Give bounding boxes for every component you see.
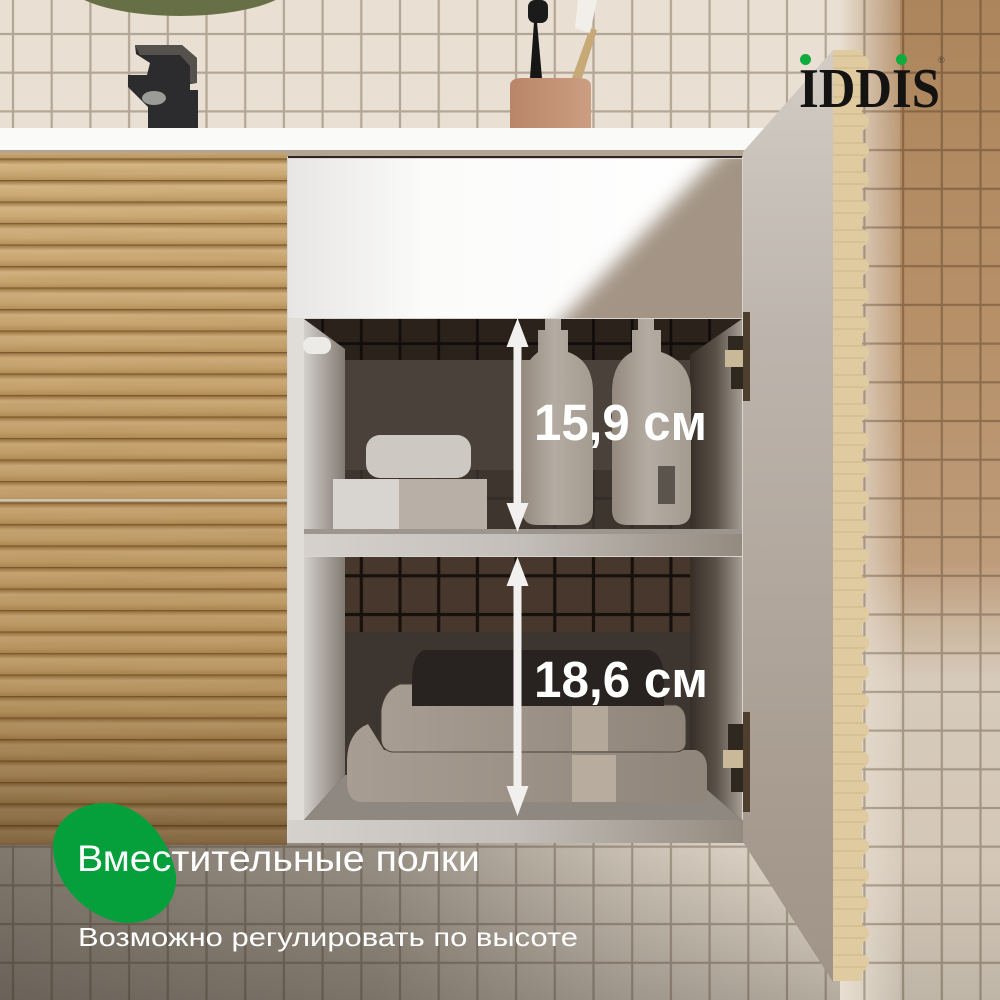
logo wordmark: IDDIS [799, 58, 940, 120]
upper dimension label: 15,9 см [534, 394, 707, 451]
lower compartment [304, 557, 742, 820]
heading: Вместительные полки [77, 838, 480, 879]
toothbrushes [528, 0, 597, 78]
countertop [0, 128, 764, 158]
green blob [53, 803, 176, 923]
shelf support pin [303, 337, 331, 354]
lower dimension arrow [506, 557, 528, 816]
logo green dots [800, 54, 907, 65]
bottles [522, 319, 691, 525]
mirror edge [65, 0, 295, 16]
upper hinge [725, 312, 750, 401]
registered mark: ® [938, 55, 945, 65]
bottom towel band [572, 755, 616, 802]
door wood edge [833, 50, 869, 981]
dark towel [412, 650, 664, 706]
upper compartment [303, 319, 742, 530]
middle towel [381, 684, 686, 752]
lower hinge [723, 712, 750, 812]
cabinet body [287, 158, 744, 843]
cream jar [366, 435, 471, 478]
open door [743, 50, 833, 982]
upper dimension arrow [506, 318, 528, 532]
lower dimension label: 18,6 см [534, 651, 708, 708]
bottom towel [347, 724, 707, 802]
middle shelf [304, 529, 742, 556]
middle towel band [572, 706, 608, 751]
wood slatted drawer front [0, 153, 287, 845]
towels [347, 650, 707, 802]
cup [510, 78, 591, 128]
subheading: Возможно регулировать по высоте [78, 922, 578, 952]
faucet [128, 45, 198, 128]
logo [799, 54, 945, 120]
box [333, 479, 487, 529]
